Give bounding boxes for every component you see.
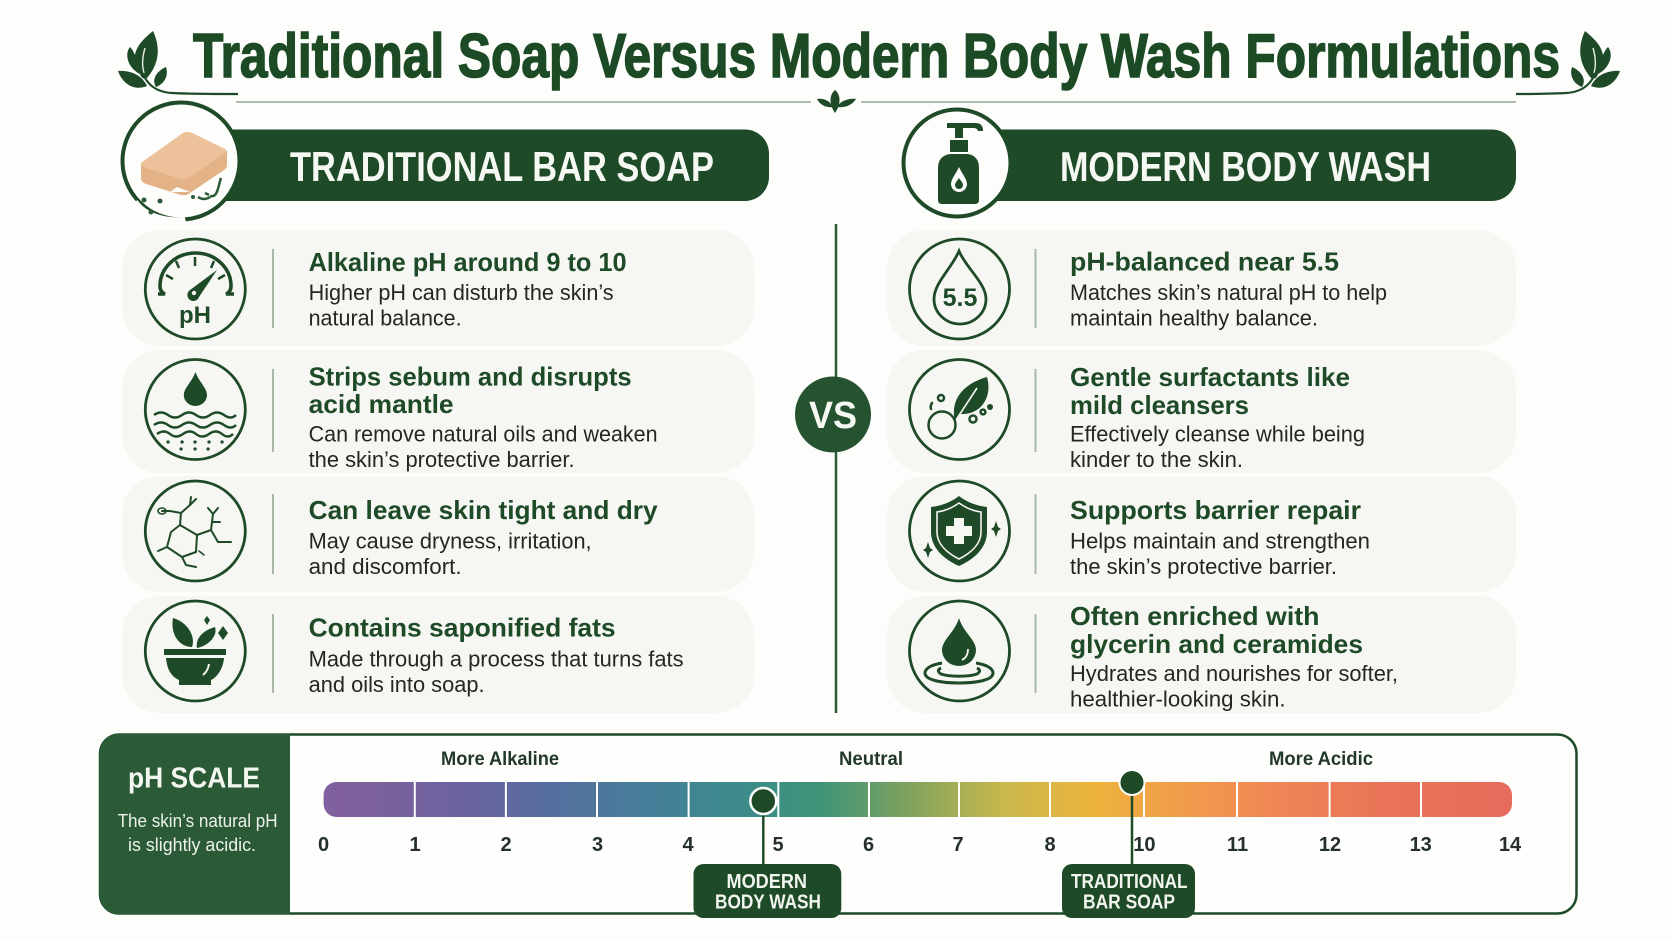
icon: left leaf sprig	[118, 31, 238, 94]
scale numbers: 6	[863, 834, 874, 856]
marker: traditional bar soap: BAR SOAP	[1083, 892, 1175, 914]
text: pH-balanced: maintain healthy balance.	[1070, 306, 1318, 330]
text: tight and dry	[309, 495, 658, 579]
text: gentle surfactants: mild cleansers	[1070, 390, 1249, 420]
text: tight and dry: Can leave skin tight and dry	[309, 495, 658, 525]
scale direction labels: Neutral	[839, 749, 903, 770]
text: glycerin and ceramides	[1070, 601, 1398, 712]
icon: right leaf sprig	[1516, 31, 1620, 94]
marker: modern body wash	[694, 788, 841, 918]
panel: pH scale	[99, 734, 1576, 918]
pH scale label block: The skin’s natural pH	[118, 811, 278, 831]
icon: drop with ripples	[910, 601, 1010, 701]
pH scale label block: pH SCALE	[128, 763, 260, 795]
scale numbers: 14	[1499, 834, 1522, 856]
text: saponified fats: Contains saponified fats	[309, 613, 616, 643]
text: gentle surfactants: Effectively cleanse while being	[1070, 422, 1365, 447]
VS badge	[795, 376, 871, 452]
icon: pump bottle	[904, 110, 1010, 216]
text: strips sebum: the skin’s protective barrier.	[309, 447, 575, 472]
scale direction labels: More Alkaline	[441, 749, 559, 770]
text: tight and dry: and discomfort.	[309, 554, 462, 579]
scale direction labels	[441, 749, 1373, 770]
text: saponified fats: Made through a process that turns fats	[309, 647, 684, 672]
icon: mortar bowl with leaves	[145, 601, 245, 701]
text: pH-balanced	[1070, 246, 1387, 330]
header pill	[960, 130, 1516, 201]
pH scale label block	[99, 734, 290, 914]
icon: soap bar	[122, 102, 240, 222]
text: barrier repair: Helps maintain and strengthen	[1070, 529, 1370, 554]
text: pH-balanced: Matches skin’s natural pH to help	[1070, 280, 1387, 305]
icon: leaf and bubbles	[910, 360, 1010, 460]
icon: drop over skin layers	[145, 360, 245, 460]
card: tight and dry	[122, 476, 754, 592]
scale numbers: 5	[772, 834, 784, 856]
card: alkaline pH	[122, 230, 754, 346]
scale numbers: 3	[592, 834, 603, 856]
marker: traditional bar soap: TRADITIONAL	[1071, 871, 1188, 893]
text: pH-balanced: pH-balanced near 5.5	[1070, 246, 1339, 276]
card: saponified fats	[122, 596, 754, 713]
card: glycerin and ceramides	[887, 596, 1516, 713]
text: tight and dry: May cause dryness, irritation,	[309, 529, 592, 554]
scale numbers: 8	[1044, 834, 1056, 856]
text: saponified fats: and oils into soap.	[309, 672, 485, 697]
header: traditional bar soap	[122, 102, 769, 222]
header: modern body wash	[904, 110, 1516, 216]
card: gentle surfactants	[887, 350, 1516, 473]
icon: 5.5 drop: 5.5	[943, 284, 977, 312]
text: alkaline pH	[309, 247, 627, 331]
text: gentle surfactants: kinder to the skin.	[1070, 447, 1243, 472]
scale numbers: 11	[1227, 834, 1248, 856]
marker: modern body wash: MODERN	[726, 871, 807, 893]
card: strips sebum	[122, 350, 754, 473]
text: gentle surfactants: Gentle surfactants like	[1070, 362, 1350, 392]
scale numbers	[318, 834, 1522, 856]
text: alkaline pH: Higher pH can disturb the skin’s	[309, 280, 614, 305]
scale numbers: 1	[409, 834, 421, 856]
icon: pH gauge	[145, 239, 245, 339]
VS badge: VS	[809, 395, 857, 437]
scale numbers: 7	[952, 834, 964, 856]
text: strips sebum: Strips sebum and disrupts	[309, 362, 632, 392]
text: barrier repair	[1070, 495, 1370, 579]
icon: pH gauge: pH	[179, 302, 211, 329]
marker: traditional bar soap	[1062, 770, 1195, 918]
header pill	[180, 130, 769, 201]
icon: cracked skin	[145, 481, 245, 581]
scale numbers: 12	[1319, 834, 1341, 856]
panel frame	[100, 734, 1576, 914]
text: alkaline pH: Alkaline pH around 9 to 10	[309, 247, 627, 277]
card: pH-balanced	[887, 230, 1516, 346]
scale numbers: 0	[318, 834, 329, 856]
pH scale label block: is slightly acidic.	[128, 835, 256, 855]
icon: 5.5 drop	[910, 239, 1010, 339]
text: barrier repair: Supports barrier repair	[1070, 495, 1361, 525]
text: glycerin and ceramides: Often enriched with	[1070, 601, 1320, 631]
centre divider line	[835, 224, 837, 713]
icon: shield with cross	[910, 481, 1010, 581]
scale numbers: 10	[1133, 834, 1156, 856]
panel: modern body wash properties	[887, 230, 1516, 713]
text: strips sebum: Can remove natural oils and weaken	[309, 422, 658, 447]
text: glycerin and ceramides: Hydrates and nourishes for softer,	[1070, 661, 1398, 686]
text: glycerin and ceramides: glycerin and ceramides	[1070, 629, 1363, 659]
scale numbers: 2	[500, 834, 512, 856]
scale numbers: 13	[1410, 834, 1432, 856]
text: strips sebum	[309, 362, 658, 472]
header text: TRADITIONAL BAR SOAP	[290, 143, 714, 190]
pH colour bar	[324, 782, 1512, 817]
card: barrier repair	[887, 476, 1516, 592]
text: alkaline pH: natural balance.	[309, 306, 462, 331]
header text: MODERN BODY WASH	[1060, 143, 1431, 190]
scale numbers: 4	[682, 834, 694, 856]
scale direction labels: More Acidic	[1269, 749, 1373, 770]
text: gentle surfactants	[1070, 362, 1365, 472]
panel: traditional soap properties	[122, 230, 754, 713]
text: glycerin and ceramides: healthier-looking skin.	[1070, 686, 1286, 712]
text: strips sebum: acid mantle	[309, 389, 454, 419]
title divider with centre ornament	[236, 90, 1516, 113]
text: saponified fats	[309, 613, 684, 697]
marker: modern body wash: BODY WASH	[715, 892, 821, 914]
text: barrier repair: the skin’s protective barrier.	[1070, 554, 1337, 579]
